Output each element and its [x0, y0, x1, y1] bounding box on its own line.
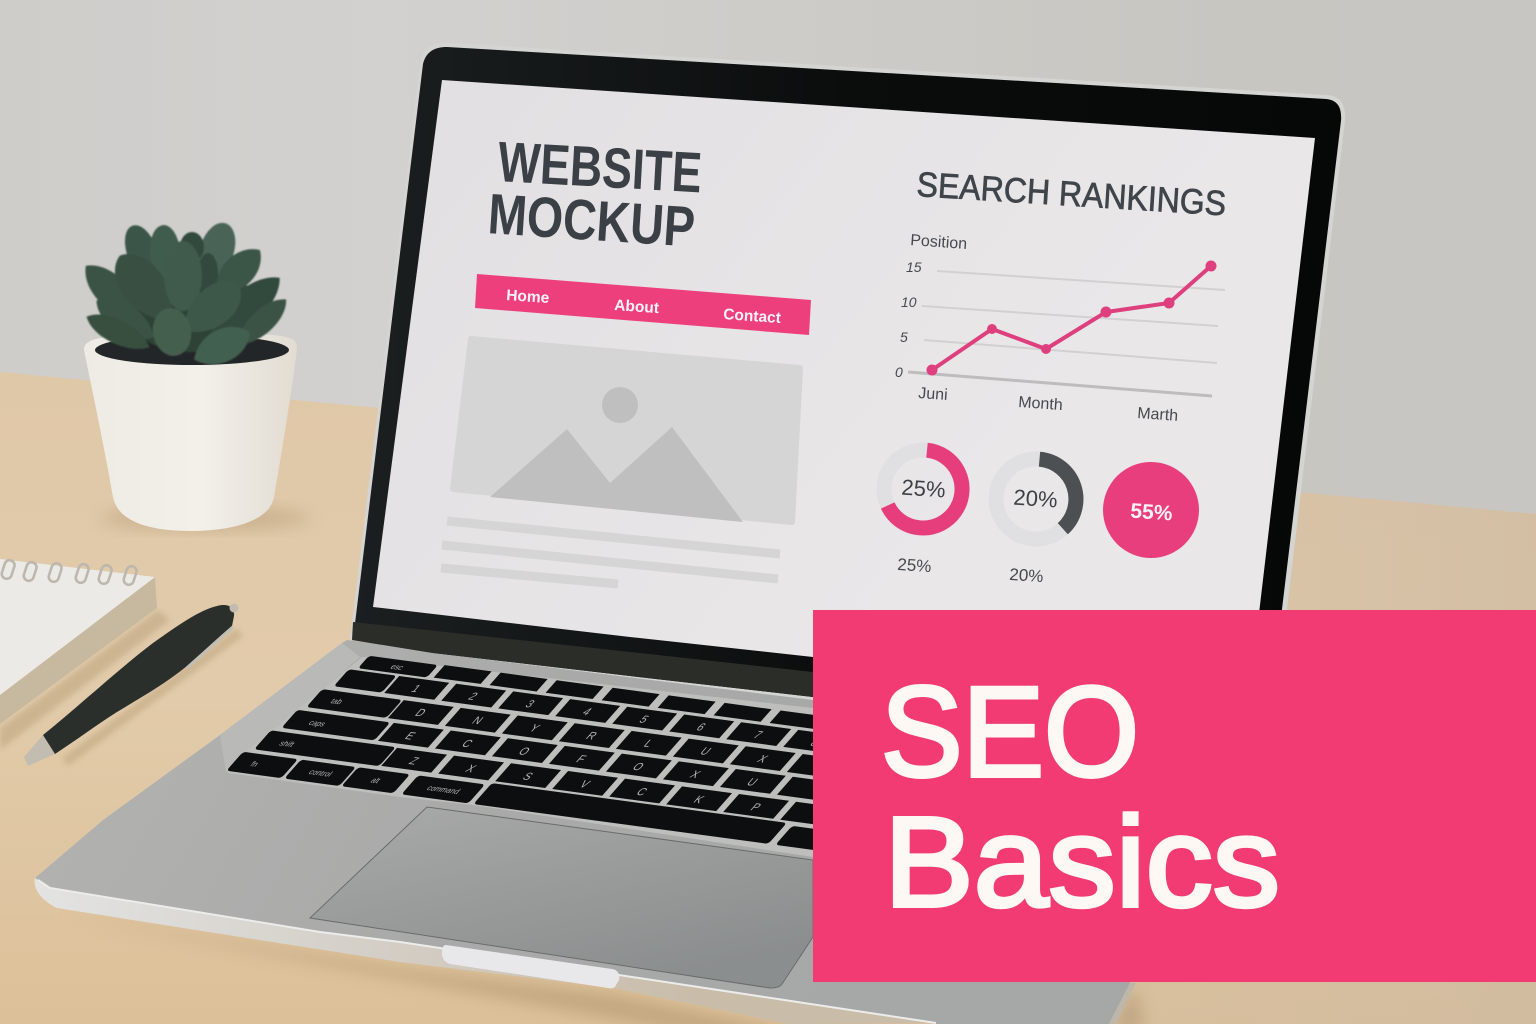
key legends: S — [519, 770, 537, 783]
key legends: N — [469, 714, 487, 727]
key legends — [248, 656, 858, 837]
placeholder text lines — [441, 521, 780, 584]
key legends: control — [307, 768, 334, 778]
donut caption 20 percent: 20% — [1009, 565, 1044, 586]
key legends: 8 — [807, 736, 824, 749]
x axis labels: Month — [1018, 394, 1063, 414]
pen clip — [187, 627, 233, 668]
hinge chin — [352, 622, 813, 697]
y axis labels: 10 — [901, 294, 917, 310]
key legends: C — [459, 737, 477, 750]
key legends: 7 — [750, 728, 766, 741]
screen: search rankings — [884, 165, 1227, 586]
spiral rings — [0, 559, 138, 586]
mockup title: MOCKUP — [486, 182, 697, 260]
white pot — [84, 334, 297, 531]
x axis — [908, 372, 1212, 396]
key legends: X — [462, 762, 480, 775]
x axis labels — [918, 385, 1179, 425]
key legends: F — [573, 753, 590, 765]
key legends: tab — [328, 697, 345, 706]
y axis labels — [895, 259, 922, 380]
y axis labels: 0 — [895, 364, 903, 380]
deck right edge — [1109, 983, 1136, 1024]
solid circle 55 percent: 55% — [1130, 500, 1174, 525]
laptop base shadow — [57, 914, 1145, 1024]
navigation bar: Home — [506, 287, 550, 307]
wooden desk — [0, 372, 1536, 1024]
key legends: 4 — [579, 705, 596, 718]
image placeholder — [453, 339, 800, 522]
key legends: Y — [526, 722, 543, 734]
key legends: O — [515, 745, 533, 758]
mockup title — [486, 130, 704, 260]
key legends: D — [412, 706, 430, 719]
speaker strip — [220, 643, 360, 772]
key legends: 5 — [636, 713, 653, 726]
front lip — [35, 878, 936, 1024]
x axis labels: Marth — [1137, 405, 1179, 425]
lip highlight — [38, 880, 936, 1023]
key legends: E — [402, 729, 419, 742]
key legends: 6 — [693, 721, 710, 733]
donut 25 percent: 25% — [901, 475, 946, 503]
x axis labels: Juni — [918, 385, 948, 404]
key legends: X — [754, 752, 771, 765]
soil — [95, 335, 289, 365]
key legends: U — [697, 745, 715, 758]
key legends: caps — [306, 719, 328, 728]
donut 20 percent: 20% — [1013, 485, 1058, 513]
succulent leaves — [75, 218, 294, 374]
screen: website mockup — [441, 130, 811, 584]
notebook shadow — [0, 610, 170, 750]
keyboard well — [226, 657, 813, 857]
key legends: U — [744, 776, 761, 788]
ranking line — [926, 260, 1216, 376]
key legends: 2 — [465, 690, 481, 703]
search rankings heading: SEARCH RANKINGS — [915, 165, 1227, 223]
navigation bar: About — [614, 297, 660, 317]
key legends: alt — [368, 776, 383, 785]
key legends: shift — [277, 739, 297, 749]
grid lines — [922, 271, 1225, 363]
y axis labels: 5 — [900, 329, 908, 345]
key legends: C — [633, 785, 651, 798]
key legends: Z — [406, 755, 422, 767]
key legends: V — [576, 778, 594, 790]
left modifier keys — [226, 651, 951, 854]
keyboard — [226, 651, 980, 858]
key legends: O — [629, 760, 647, 773]
pen tip — [24, 735, 55, 766]
pot shadow — [100, 506, 310, 530]
notebook page edges — [0, 577, 157, 724]
pen shadow — [65, 632, 240, 762]
navigation bar: Contact — [723, 306, 781, 327]
key legends: command — [425, 784, 462, 796]
pen — [24, 604, 240, 766]
thumb notch — [442, 945, 619, 988]
key legends: I — [813, 760, 826, 773]
notebook cover page — [0, 559, 155, 695]
donut caption 25 percent: 25% — [897, 555, 932, 576]
pen button — [230, 604, 238, 612]
background wall — [0, 0, 1536, 520]
key legends: R — [583, 729, 601, 742]
key legends: fn — [248, 760, 261, 769]
display — [373, 80, 1315, 690]
key legends: X — [687, 768, 704, 781]
pink title panel — [813, 610, 1536, 982]
title: SEO: SEO — [881, 661, 1139, 804]
donut 25 percent — [884, 450, 962, 528]
solid circle 55 percent — [1103, 462, 1199, 558]
spiral notebook — [0, 559, 170, 750]
black bezel — [353, 47, 1341, 700]
laptop base deck — [35, 640, 1140, 1024]
mockup title: WEBSITE — [496, 130, 704, 205]
key legends: 1 — [408, 682, 424, 695]
potted succulent plant — [75, 218, 310, 531]
navigation bar — [475, 274, 811, 335]
y axis title: Position — [910, 232, 968, 253]
pen body — [43, 605, 234, 754]
donut 20 percent — [996, 459, 1076, 539]
trackpad — [310, 807, 813, 988]
key legends: P — [747, 801, 765, 813]
key legends: 3 — [522, 698, 539, 710]
key legends: K — [690, 793, 708, 806]
y axis labels: 15 — [906, 259, 922, 275]
title: Basics: Basics — [884, 791, 1280, 934]
line chart — [895, 232, 1225, 425]
key legends: L — [641, 737, 657, 750]
key legends: esc — [388, 663, 406, 672]
key rows — [335, 667, 975, 826]
laptop lid frame — [350, 43, 1345, 700]
